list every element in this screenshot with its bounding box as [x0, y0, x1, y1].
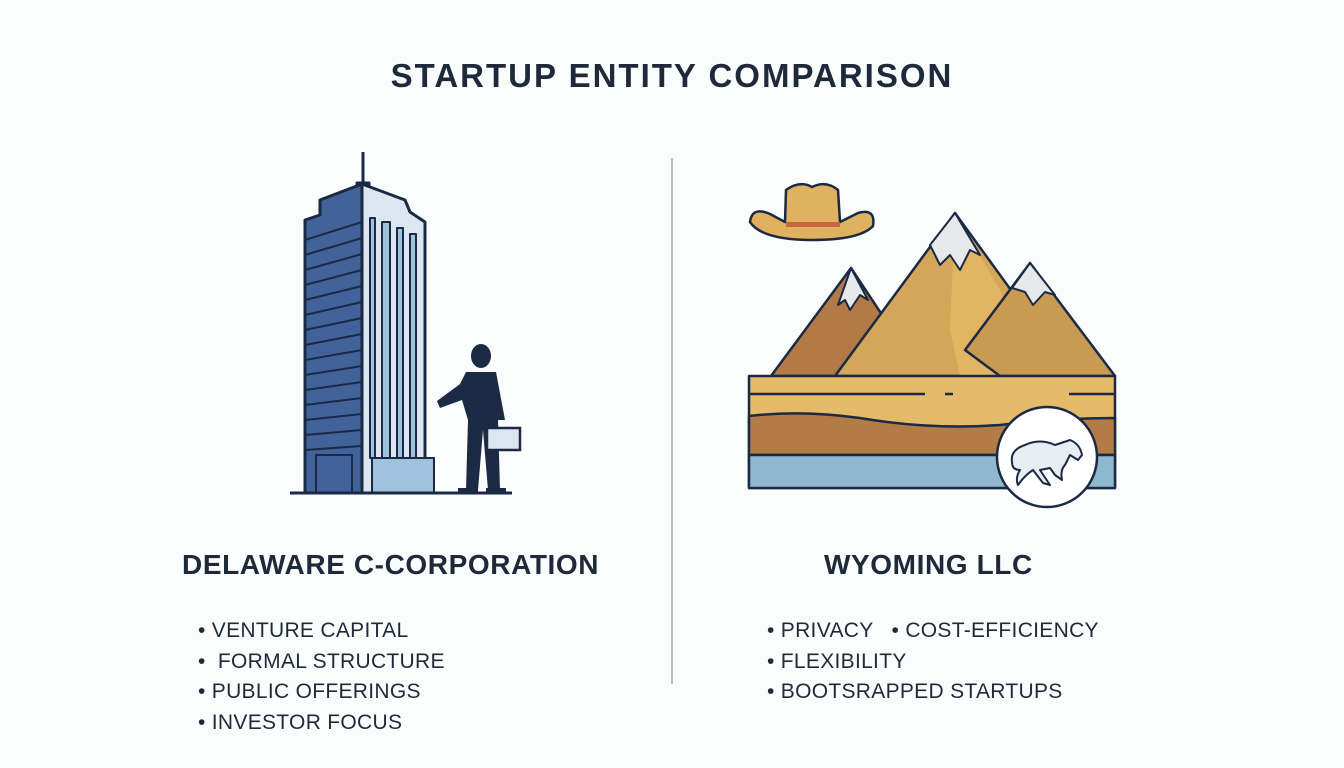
list: wyoming: • FLEXIBILITY — [767, 650, 907, 672]
list: delaware: • INVESTOR FOCUS — [198, 710, 402, 734]
list: wyoming: • BOOTSRAPPED STARTUPS — [767, 680, 1063, 703]
title: STARTUP ENTITY COMPARISON — [391, 57, 953, 94]
horse badge — [997, 407, 1097, 507]
list: wyoming: • PRIVACY • COST-EFFICIENCY — [767, 619, 1099, 642]
divider — [671, 158, 673, 684]
list: delaware: • PUBLIC OFFERINGS — [198, 680, 421, 703]
list: delaware: • FORMAL STRUCTURE — [198, 650, 445, 672]
list: delaware — [198, 619, 445, 734]
list: wyoming — [767, 619, 1099, 703]
list: delaware: • VENTURE CAPITAL — [198, 619, 408, 642]
heading: wyoming: WYOMING LLC — [824, 549, 1033, 580]
heading: delaware: DELAWARE C-CORPORATION — [182, 549, 599, 580]
hat — [750, 184, 873, 240]
